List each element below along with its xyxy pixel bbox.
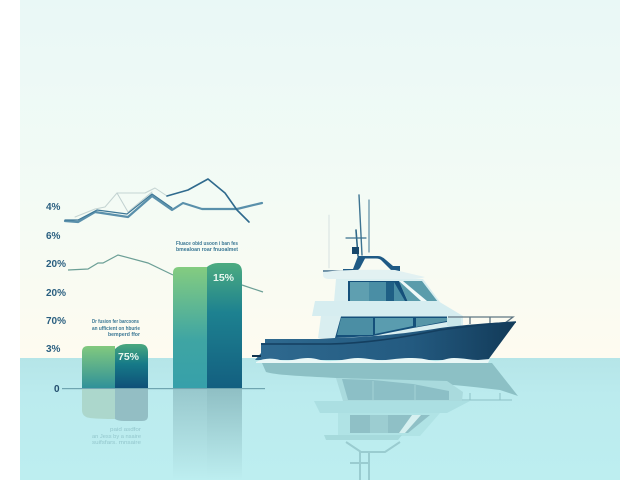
mast and antennas: [329, 195, 369, 268]
reflected hull: [262, 363, 518, 396]
reflected lower cabin: [336, 378, 463, 401]
bar group: tall bars: [173, 263, 242, 388]
white panel by window: [447, 318, 461, 326]
boat reflection: [262, 363, 518, 480]
bar caption: small bars: bemperd ffor: [108, 332, 140, 338]
boat: [252, 195, 516, 363]
reflected roof: [324, 435, 402, 440]
hull: [255, 322, 516, 360]
line chart: lower trend line: [68, 255, 263, 292]
bow wave foam: [256, 358, 490, 363]
y-axis labels: 70%: [46, 316, 66, 327]
y-axis labels: 0: [54, 384, 60, 395]
reflected caption: suifsfars. mnsaire: [92, 440, 141, 446]
mid deck: [312, 301, 463, 316]
bow railing: [448, 317, 513, 324]
radar box: [352, 247, 359, 254]
y-axis labels: 20%: [46, 259, 66, 270]
radar arch: [343, 256, 400, 271]
bar caption: small bars: [92, 319, 140, 338]
y-axis labels: [46, 202, 66, 395]
y-axis labels: 3%: [46, 344, 61, 355]
bar caption: tall bars: bmealoan roar fnuoalmet: [176, 247, 238, 253]
reflected caption: [92, 427, 141, 446]
bar caption: tall bars: Fluace obid usoon i ban fes: [176, 241, 238, 247]
reflected deck: [314, 401, 470, 413]
bar value label: 15%: [213, 272, 235, 284]
lower cabin: [318, 316, 463, 340]
line chart: upper trend lines: [65, 179, 262, 222]
water surface: [20, 358, 620, 480]
reflected caption: paid asdfor: [110, 427, 141, 433]
upper cabin: [334, 279, 440, 302]
bar reflections: [82, 389, 242, 480]
bar caption: small bars: Dr fusion fer barcoons: [92, 319, 139, 325]
sheer stripe: [261, 322, 516, 344]
upper window: [348, 281, 438, 302]
bar group: small bars: [82, 344, 148, 388]
bar value label: 75%: [118, 351, 140, 363]
axis baseline: [62, 388, 265, 389]
y-axis labels: 4%: [46, 202, 61, 213]
bar caption: small bars: an ufficient on hburie: [92, 326, 140, 332]
reflected upper cabin: [338, 413, 440, 436]
stern step: [252, 355, 261, 357]
reflected caption: an Jess by a nsaire: [92, 434, 141, 440]
top roof: [323, 270, 425, 279]
y-axis labels: 20%: [46, 288, 66, 299]
y-axis labels: 6%: [46, 231, 61, 242]
lower windows: [335, 316, 447, 338]
background panel: [20, 0, 620, 358]
reflected arch and mast: [346, 442, 400, 480]
bar caption: tall bars: [176, 241, 238, 253]
